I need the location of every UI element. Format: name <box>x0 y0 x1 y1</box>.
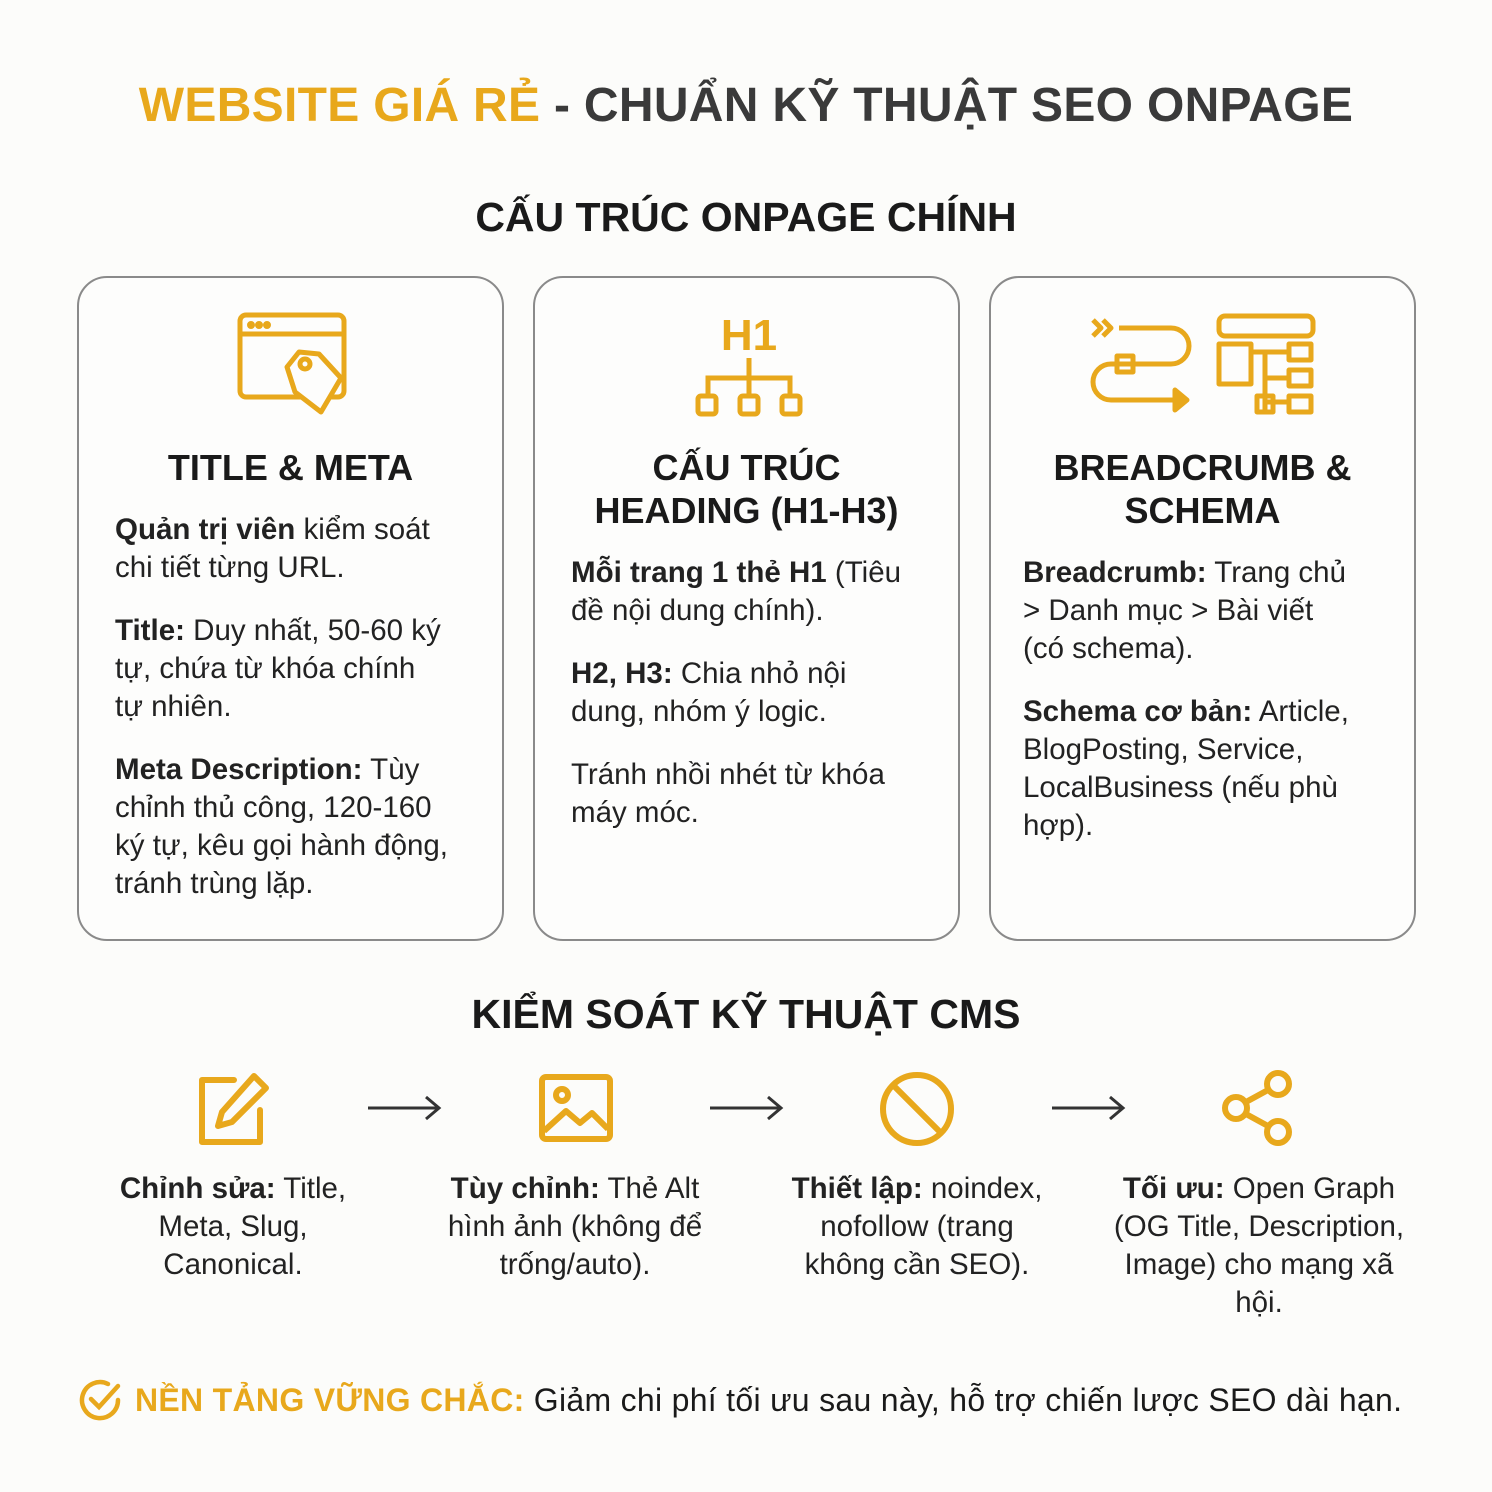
heading <box>1054 447 1351 531</box>
icon: browser tag <box>238 312 346 414</box>
step text: open graph: Tối ưu: Open Graph <box>1123 1172 1395 1205</box>
footer callout: NỀN TẢNG VỮNG CHẮC: Giảm chi phí tối ưu sau này, hỗ trợ chiến lược SEO dài hạn. <box>135 1382 1402 1418</box>
heading <box>594 447 898 531</box>
step text: alt: Tùy chỉnh: Thẻ Alt <box>451 1172 699 1205</box>
step text: edit: Meta, Slug, <box>158 1210 308 1243</box>
step text: noindex: Thiết lập: noindex, <box>792 1172 1042 1205</box>
icon: image <box>539 1074 613 1142</box>
step text: noindex: không cần SEO). <box>805 1248 1029 1281</box>
title: WEBSITE GIÁ RẺ - CHUẨN KỸ THUẬT SEO ONPAGE <box>139 79 1353 132</box>
step text: open graph: Image) cho mạng xã <box>1125 1248 1393 1281</box>
body text: Tránh nhồi nhét từ khóa <box>571 758 885 791</box>
arrow 1 <box>368 1096 442 1120</box>
heading: onpage structure: CẤU TRÚC ONPAGE CHÍNH <box>475 194 1017 240</box>
heading: CMS control: KIỂM SOÁT KỸ THUẬT CMS <box>472 991 1020 1037</box>
step text: edit: Chỉnh sửa: Title, <box>120 1172 346 1205</box>
panel: heading structure <box>533 276 960 941</box>
body text: hợp). <box>1023 809 1093 842</box>
body text: H2, H3: Chia nhỏ nội <box>571 657 846 690</box>
body text: tự, chứa từ khóa chính <box>115 652 415 685</box>
body text: đề nội dung chính). <box>571 594 824 627</box>
heading: TITLE & META <box>168 447 413 488</box>
body text: máy móc. <box>571 796 699 829</box>
body text: Title: Duy nhất, 50-60 ký <box>115 614 441 647</box>
body text: Mỗi trang 1 thẻ H1 (Tiêu <box>571 556 901 589</box>
icon: H1 hierarchy: H1 <box>721 311 777 360</box>
body text: Meta Description: Tùy <box>115 753 419 786</box>
arrow 3 <box>1052 1096 1126 1120</box>
body text <box>115 513 448 900</box>
step text: open graph: (OG Title, Description, <box>1114 1210 1404 1243</box>
icon: check circle <box>80 1380 120 1420</box>
step text: alt: trống/auto). <box>500 1248 650 1281</box>
body text: Breadcrumb: Trang chủ <box>1023 556 1346 589</box>
heading: CẤU TRÚC <box>652 447 840 488</box>
step text: edit: Canonical. <box>163 1248 303 1281</box>
icon: prohibited <box>880 1072 954 1146</box>
body text: chỉnh thủ công, 120-160 <box>115 791 432 824</box>
body text <box>571 556 901 829</box>
step text: edit <box>120 1172 346 1281</box>
heading: BREADCRUMB & <box>1054 447 1351 488</box>
icon: breadcrumb flow and schema tree <box>1090 314 1316 414</box>
step text: alt: hình ảnh (không để <box>448 1210 702 1243</box>
body text: tránh trùng lặp. <box>115 867 313 900</box>
body text: dung, nhóm ý logic. <box>571 695 827 728</box>
body text: tự nhiên. <box>115 690 232 723</box>
body text: Schema cơ bản: Article, <box>1023 695 1349 728</box>
step text: noindex <box>792 1172 1042 1281</box>
body text: Quản trị viên kiểm soát <box>115 513 430 546</box>
heading: SCHEMA <box>1124 490 1280 531</box>
body text: ký tự, kêu gọi hành động, <box>115 829 448 862</box>
step text: alt <box>448 1172 702 1281</box>
body text <box>1023 556 1349 842</box>
icon: H1 hierarchy <box>696 311 802 416</box>
body text: > Danh mục > Bài viết <box>1023 594 1313 627</box>
body text: BlogPosting, Service, <box>1023 733 1303 766</box>
arrow 2 <box>710 1096 784 1120</box>
body text: LocalBusiness (nếu phù <box>1023 771 1338 804</box>
icon: edit <box>199 1073 269 1145</box>
step text: open graph: hội. <box>1235 1286 1283 1319</box>
step text: open graph <box>1114 1172 1404 1319</box>
body text: chi tiết từng URL. <box>115 551 345 584</box>
icon: share <box>1222 1070 1292 1146</box>
heading: HEADING (H1-H3) <box>594 490 898 531</box>
body text: (có schema). <box>1023 632 1194 665</box>
step text: noindex: nofollow (trang <box>820 1210 1014 1243</box>
panel: breadcrumb & schema <box>989 276 1416 941</box>
panel: title & meta <box>77 276 504 941</box>
